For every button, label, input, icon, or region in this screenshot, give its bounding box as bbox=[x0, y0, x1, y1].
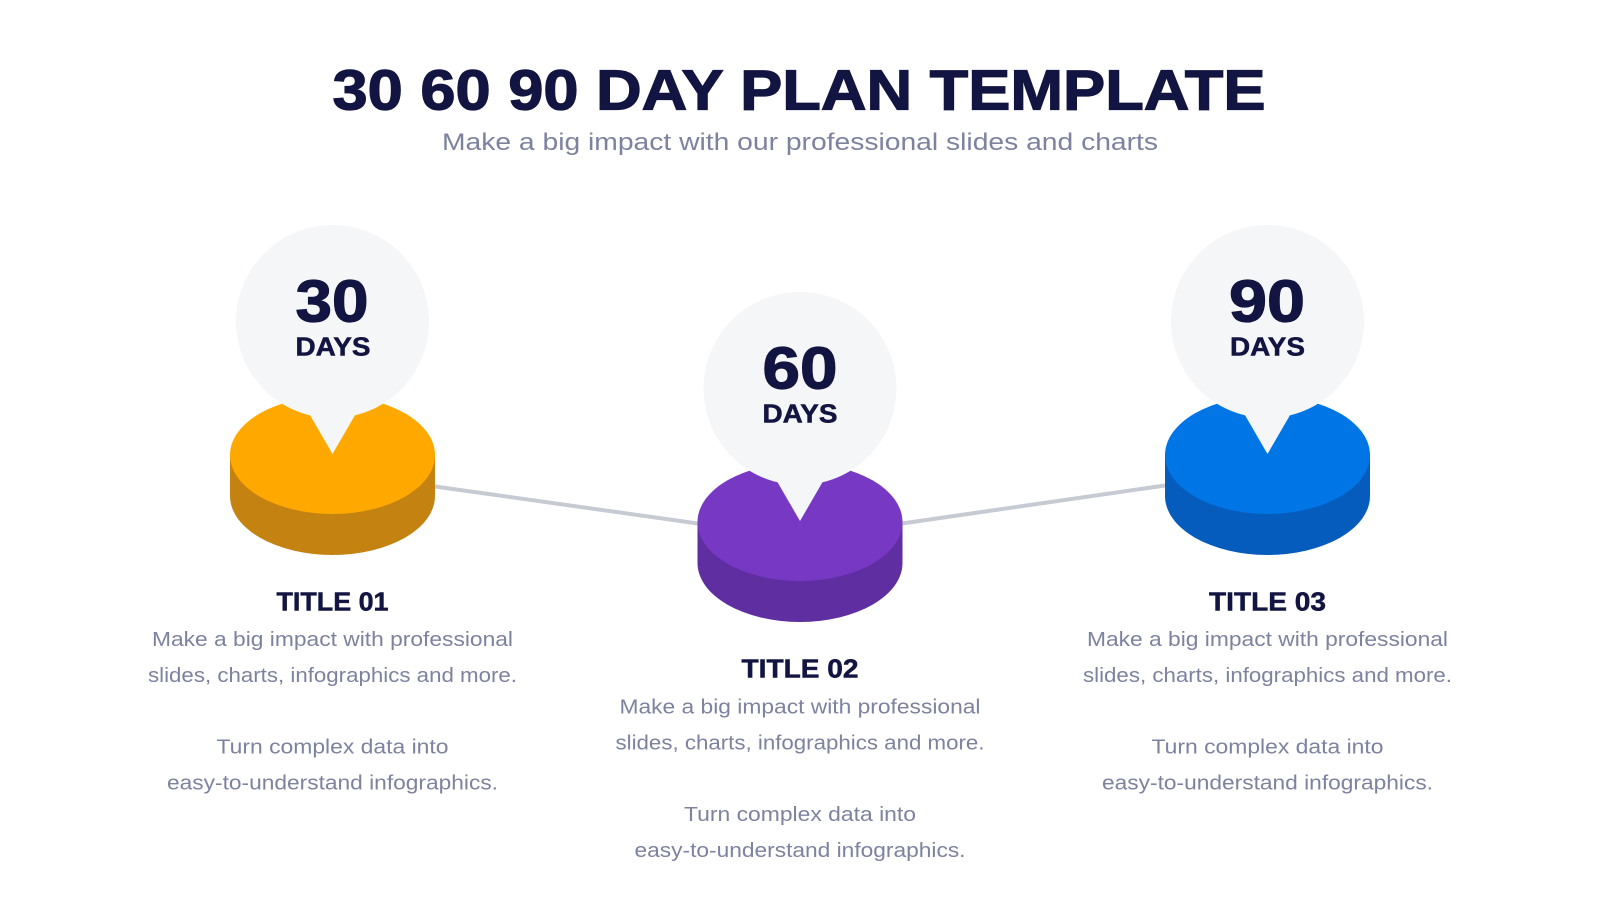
text block: title 02 bbox=[616, 654, 984, 862]
speech bubble: 90 days bbox=[1171, 225, 1364, 454]
connector: step 2 to step 3 bbox=[902, 486, 1165, 524]
text block: title 02: easy-to-understand infographics. bbox=[634, 839, 966, 862]
text block: title 02: Turn complex data into bbox=[684, 803, 916, 826]
connector: step 1 to step 2 bbox=[435, 486, 698, 524]
text block: title 02: Make a big impact with professional bbox=[620, 696, 980, 718]
text block: title 03: slides, charts, infographics and more. bbox=[1083, 664, 1452, 687]
speech bubble: 90 days: DAYS bbox=[1230, 332, 1305, 362]
speech bubble: 30 days bbox=[236, 225, 429, 454]
text block: title 02: slides, charts, infographics and more. bbox=[616, 732, 984, 754]
text block: title 01: Turn complex data into bbox=[216, 736, 448, 758]
title: 30 60 90 DAY PLAN TEMPLATE bbox=[332, 58, 1266, 122]
cylinder base: orange bbox=[230, 396, 435, 555]
speech bubble: 60 days bbox=[704, 292, 896, 521]
text block: title 02: TITLE 02 bbox=[742, 654, 858, 684]
text block: title 01: TITLE 01 bbox=[276, 586, 388, 616]
speech bubble: 30 days: 30 bbox=[296, 268, 368, 334]
cylinder base: blue bbox=[1165, 396, 1370, 555]
text block: title 03: Make a big impact with professional bbox=[1087, 628, 1448, 651]
text block: title 03: Turn complex data into bbox=[1152, 736, 1384, 758]
step 3: 90 days marker bbox=[1165, 225, 1370, 555]
text block: title 01: easy-to-understand infographics. bbox=[167, 772, 498, 794]
text block: title 01 bbox=[148, 586, 517, 794]
text block: title 01: Make a big impact with professional bbox=[152, 628, 513, 651]
step 2: 60 days marker bbox=[698, 292, 902, 622]
speech bubble: 30 days: DAYS bbox=[296, 332, 370, 362]
speech bubble: 90 days: 90 bbox=[1229, 268, 1305, 334]
text block: title 03 bbox=[1083, 586, 1452, 794]
step 1: 30 days marker bbox=[230, 225, 435, 555]
text block: title 03: easy-to-understand infographics. bbox=[1102, 772, 1433, 794]
speech bubble: 60 days: DAYS bbox=[762, 398, 838, 428]
speech bubble: 60 days: 60 bbox=[762, 336, 838, 402]
subtitle: Make a big impact with our professional slides and charts bbox=[442, 129, 1158, 156]
text block: title 01: slides, charts, infographics and more. bbox=[148, 664, 517, 687]
text block: title 03: TITLE 03 bbox=[1209, 586, 1326, 616]
cylinder base: purple bbox=[698, 463, 902, 622]
